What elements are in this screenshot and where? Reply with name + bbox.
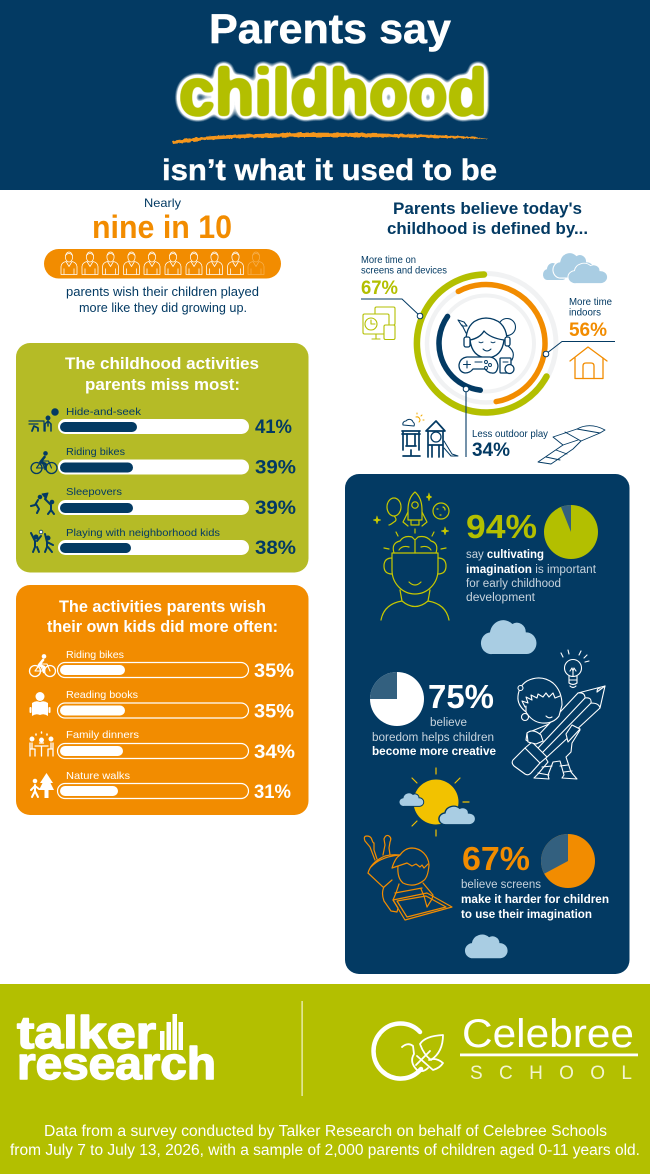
row: playing with neighborhood kids [31,527,296,559]
row: nature walks: 31% [254,782,291,803]
row: riding bikes: 35% [254,661,294,682]
header banner [0,0,650,190]
stat: 75 percent: boredom helps children [372,732,494,744]
callout: indoors 56 percent [543,297,615,357]
source note: Data from a survey conducted by Talker Research on behalf of Celebree Schools [44,1123,607,1140]
row: hide-and-seek: 41% [255,417,292,438]
row: riding bikes: Riding bikes [66,446,125,458]
row: riding bikes: 39% [255,458,296,478]
source note [10,1123,640,1159]
row: hide-and-seek [29,406,292,438]
icon: house [570,347,607,378]
row: sleepovers: Sleepovers [66,486,122,498]
panel heading: parents miss most: [85,375,240,394]
title line: isn't what it used to be: isn’t what it used to be [162,154,497,187]
icon: imagination head [373,492,449,620]
row: reading books: Reading books [66,689,138,701]
row: family dinners [30,729,295,763]
logo: Celebree School: SCHOOL [470,1063,632,1084]
callout: screens 67 percent: 67% [361,278,398,299]
logo: Talker Research [17,1007,216,1089]
panel heading: The childhood activities [65,354,259,373]
row: playing with neighborhood kids: Playing with neighborhood kids [66,527,220,539]
source note: from July 7 to July 13, 2026, with a sample of 2,000 parents of children aged 0-11 years old. [10,1142,640,1159]
stat: 94 percent: say cultivating [466,549,544,561]
orange pill with ten people icons [44,249,281,278]
stat: 94 percent: imagination is important [466,564,597,576]
arc: 67 percent green [417,274,546,412]
icon: clouds [543,253,608,284]
divider [302,1001,303,1096]
title line: Parents say: Parents say [209,5,452,52]
row: riding bikes [30,649,294,682]
stat: 67 percent [461,834,609,921]
row: reading books [30,689,294,722]
stat caption [66,285,259,315]
row: riding bikes: Riding bikes [66,649,124,661]
row: hide-and-seek: Hide-and-seek [66,406,142,418]
row: family dinners: 34% [254,742,295,763]
stat: 94 percent: for early childhood [466,578,561,590]
arc: 56 percent orange [458,284,545,402]
row: riding bikes [31,446,296,478]
footer [0,984,650,1174]
panel heading [65,354,259,394]
stat: 67 percent: make it harder for children [461,894,609,906]
panel: imagination stats [345,474,630,974]
row: family dinners: Family dinners [66,729,139,741]
icon: screens and devices [363,307,395,340]
nine in 10 headline: nine in 10 [92,209,232,245]
icon: child lying with tablet [364,835,452,920]
stat: 94 percent: 94% [466,508,537,545]
callout: outdoor 34 percent: 34% [472,440,510,461]
stat: 75 percent: 75% [428,678,494,715]
icon: girl with headset and game controller [458,318,516,374]
stat: 75 percent: believe [430,717,467,729]
title word: childhood: childhood [179,55,487,129]
callout: indoors 56 percent: indoors [569,308,601,318]
radial chart heading: Parents believe today's [393,199,582,218]
icon: hopscotch [538,426,605,464]
stat: 67 percent: believe screens [461,879,541,891]
radial chart heading: childhood is defined by... [387,219,588,238]
logo: Celebree School [374,1012,638,1084]
callout: screens 67 percent [361,255,447,319]
callout: indoors 56 percent: More time [569,297,612,308]
callout: outdoor 34 percent [463,386,549,461]
panel heading: The activities parents wish [59,597,266,616]
icon: cloud [481,620,536,654]
stat: 75 percent: become more creative [372,746,496,758]
stat: 75 percent [370,672,496,758]
orange brush underline [172,132,489,144]
callout: screens 67 percent: More time on [361,255,416,266]
icon: playground [402,413,458,457]
pie: 94 percent [544,505,598,559]
row: nature walks: Nature walks [66,770,130,782]
stat: 67 percent: 67% [462,840,530,877]
Nearly label: Nearly [144,196,181,210]
pie: 67 percent [541,834,595,888]
radial chart section [361,199,615,464]
panel: childhood activities parents miss most [16,343,308,572]
radial rings [416,274,556,414]
panel: activities parents wish their kids did more often [16,585,308,815]
stat caption: parents wish their children played [66,285,259,299]
nine in 10 stat [44,196,281,315]
pie: 75 percent [370,672,424,726]
panel heading [47,597,278,636]
row: playing with neighborhood kids: 38% [255,538,296,559]
row: sleepovers [31,486,296,519]
icon: sun with clouds [399,768,476,836]
callout: outdoor 34 percent: Less outdoor play [472,428,549,440]
callout: indoors 56 percent: 56% [569,320,607,341]
icon: cloud [465,935,508,958]
stat: 94 percent: development [466,592,536,604]
row: sleepovers: 39% [255,498,296,519]
panel heading: their own kids did more often: [47,617,278,636]
stat: 94 percent [466,505,598,604]
callout: screens 67 percent: screens and devices [361,266,447,276]
logo: Talker Research: talker [17,1007,156,1058]
logo: Talker Research: research [17,1038,216,1089]
stat caption: more like they did growing up. [79,301,247,315]
radial chart heading [387,199,588,238]
logo: Celebree School: Celebree [462,1012,634,1056]
icon: boy holding pencil with lightbulb [512,650,605,779]
arc: 34 percent navy [434,291,538,396]
row: nature walks [31,770,291,803]
row: reading books: 35% [254,702,294,722]
stat: 67 percent: to use their imagination [461,909,592,921]
